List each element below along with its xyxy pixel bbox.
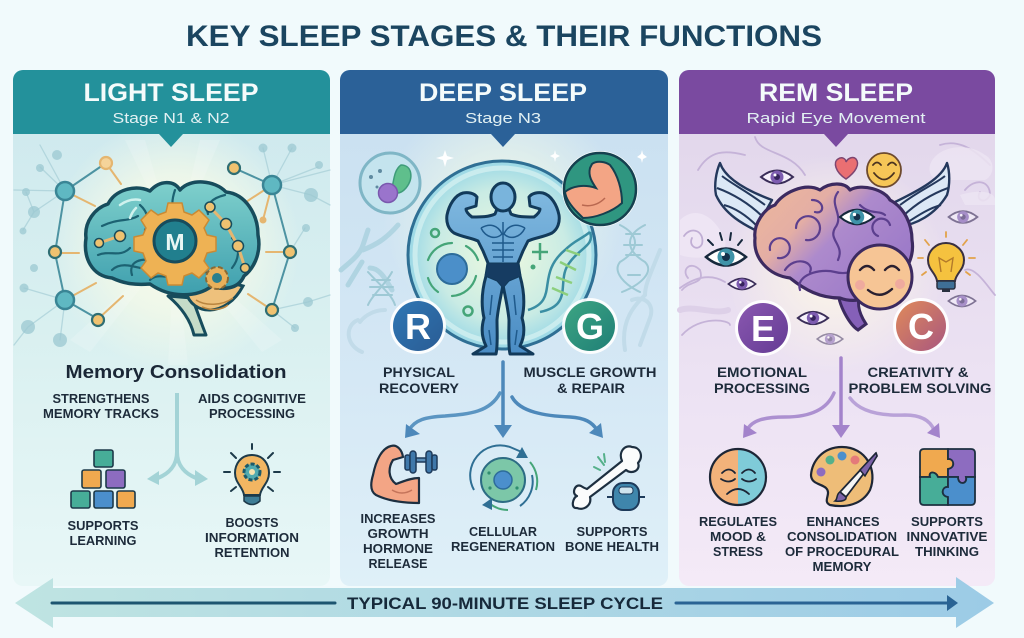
text: supports innovative thinking: INNOVATIVE	[906, 530, 988, 544]
text: regulates mood and stress: STRESS	[713, 545, 763, 559]
icon: dreaming brain	[755, 184, 913, 330]
text: supports learning: SUPPORTS	[68, 519, 138, 533]
text: aids cognitive processing	[198, 392, 306, 421]
text: cycle label: TYPICAL 90-MINUTE SLEEP CYCLE	[347, 594, 663, 613]
text: aids cognitive processing: AIDS COGNITIVE	[198, 392, 306, 406]
rem sleep header: Rapid Eye Movement	[746, 110, 927, 127]
icon: light bulb with gear	[224, 444, 280, 504]
text: supports innovative thinking	[906, 515, 988, 559]
icon: E badge	[735, 300, 791, 356]
icon: floating eyes	[706, 170, 977, 344]
icon: R badge: R	[405, 306, 431, 347]
rem sleep header: REM SLEEP	[759, 79, 913, 107]
text: enhances consolidation of procedural memory: OF PROCEDURAL	[785, 545, 899, 559]
icon: G badge	[562, 298, 618, 354]
glow	[383, 95, 623, 335]
icon: cell in circle	[360, 153, 420, 213]
icon: mixed mood face	[710, 449, 766, 505]
light sleep header	[13, 70, 330, 147]
icon: C badge: C	[908, 306, 934, 347]
text: regulates mood and stress: MOOD &	[710, 530, 766, 544]
light sleep header: LIGHT SLEEP	[84, 79, 258, 107]
text: creativity and problem solving: PROBLEM SOLVING	[848, 381, 992, 396]
text: increases growth hormone release: HORMONE	[363, 542, 433, 556]
text: increases growth hormone release: GROWTH	[368, 527, 428, 541]
text: increases growth hormone release: INCREASES	[360, 512, 436, 526]
text: emotional processing: EMOTIONAL	[717, 365, 807, 380]
text: supports innovative thinking: SUPPORTS	[911, 515, 983, 529]
text: increases growth hormone release	[360, 512, 436, 571]
panel: rem sleep	[679, 70, 995, 586]
icon: G badge: G	[576, 306, 604, 347]
icon: jigsaw puzzle	[920, 449, 975, 505]
deep sleep header: Stage N3	[465, 110, 541, 127]
gear: M	[165, 229, 185, 255]
neural network decoration	[14, 144, 330, 347]
panel: deep sleep	[340, 70, 668, 586]
text: physical recovery: RECOVERY	[379, 381, 459, 396]
arrow: forked arrow	[147, 393, 208, 486]
arrow: three branching arrows	[743, 358, 940, 438]
text: supports bone health: BONE HEALTH	[565, 540, 659, 554]
text: boosts information retention: RETENTION	[214, 546, 290, 560]
text: muscle growth and repair: MUSCLE GROWTH	[524, 365, 656, 380]
text: regulates mood and stress: REGULATES	[699, 515, 777, 529]
text: creativity and problem solving	[848, 365, 992, 396]
icon: regenerating cell	[470, 445, 537, 510]
light sleep header: Stage N1 & N2	[112, 110, 230, 127]
icon: smiling face	[867, 153, 901, 187]
arrow: three branching arrows	[405, 362, 603, 438]
gear	[134, 203, 216, 285]
text: physical recovery	[379, 365, 459, 396]
text: boosts information retention: BOOSTS	[226, 516, 278, 530]
rem sleep header	[679, 70, 995, 147]
small gear	[206, 267, 228, 289]
DNA helix	[528, 232, 591, 312]
text: boosts information retention: INFORMATION	[205, 531, 299, 545]
text: enhances consolidation of procedural memory	[785, 515, 899, 574]
text: supports learning	[68, 519, 138, 548]
icon: paint palette	[811, 447, 877, 506]
text: supports bone health	[565, 525, 659, 554]
icon: heart	[835, 158, 858, 179]
large circular disc	[408, 161, 596, 349]
text: cellular regeneration: CELLULAR	[469, 525, 537, 539]
glow	[725, 155, 945, 375]
text: boosts information retention	[205, 516, 299, 560]
icon: left wing	[715, 163, 772, 230]
text: cellular regeneration	[451, 525, 555, 554]
dream clouds and swirls	[680, 137, 995, 335]
icon: stacked blocks	[71, 450, 135, 508]
text: muscle growth and repair: & REPAIR	[557, 381, 625, 396]
text: aids cognitive processing: PROCESSING	[209, 407, 295, 421]
icon: glowing bulb	[918, 232, 975, 292]
sparkles	[436, 150, 647, 167]
radiating glow	[50, 120, 300, 370]
text: enhances consolidation of procedural memory: CONSOLIDATION	[787, 530, 897, 544]
text: strengthens memory tracks: STRENGTHENS	[52, 392, 150, 406]
icon: arm with dumbbell	[371, 446, 437, 503]
panel: light sleep	[13, 70, 330, 586]
text: physical recovery: PHYSICAL	[383, 365, 455, 380]
icon: flexing figure	[447, 183, 559, 354]
icon: R badge	[390, 298, 446, 354]
icon: sleeping face	[848, 245, 912, 309]
text: increases growth hormone release: RELEASE	[368, 557, 428, 571]
icon: E badge: E	[751, 308, 775, 349]
icon: bone with joint	[573, 446, 645, 510]
text: emotional processing	[714, 365, 810, 396]
text: cellular regeneration: REGENERATION	[451, 540, 555, 554]
text: enhances consolidation of procedural memory: MEMORY	[812, 560, 872, 574]
text: supports bone health: SUPPORTS	[576, 525, 648, 539]
text: emotional processing: PROCESSING	[714, 381, 810, 396]
title: KEY SLEEP STAGES & THEIR FUNCTIONS	[186, 20, 822, 53]
text: supports innovative thinking: THINKING	[915, 545, 979, 559]
text: muscle growth and repair	[524, 365, 656, 396]
icon: right wing	[893, 163, 949, 226]
deep sleep header: DEEP SLEEP	[419, 79, 587, 107]
heading: memory consolidation: Memory Consolidation	[66, 362, 286, 382]
icon: flexed arm circle	[562, 151, 638, 227]
text: supports learning: LEARNING	[70, 534, 136, 548]
deep sleep header	[340, 70, 668, 147]
icon: brain with memory gear	[85, 182, 259, 335]
text: strengthens memory tracks: MEMORY TRACKS	[43, 407, 159, 421]
text: regulates mood and stress	[699, 515, 777, 559]
text: enhances consolidation of procedural memory: ENHANCES	[806, 515, 880, 529]
icon: C badge	[893, 298, 949, 354]
faint neuron and DNA background	[341, 225, 660, 352]
text: strengthens memory tracks	[43, 392, 159, 421]
text: creativity and problem solving: CREATIVITY &	[868, 365, 969, 380]
sleep cycle arrow	[15, 577, 994, 628]
